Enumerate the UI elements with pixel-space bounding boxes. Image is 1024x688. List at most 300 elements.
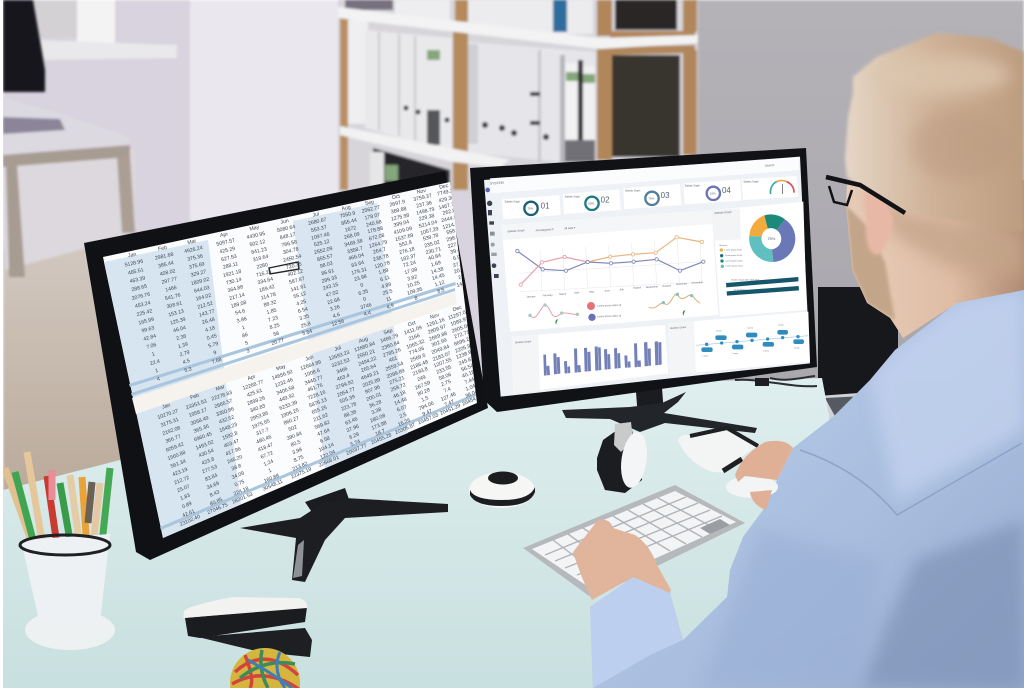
spreadsheet numbers: 1.85 (266, 307, 277, 316)
spreadsheet numbers: 22278.83 (211, 390, 233, 402)
donut panel: Statistic Graph 2015 2016 2017 (731, 279, 759, 282)
spreadsheet numbers: 541.76 (164, 292, 181, 302)
line chart panel: March (559, 293, 567, 296)
spreadsheet numbers: 238.78 (373, 253, 389, 263)
spreadsheet numbers: 720.35 (286, 261, 302, 271)
spreadsheet numbers: 298.87 (446, 233, 463, 243)
spreadsheet numbers: Nov (429, 312, 440, 321)
spreadsheet numbers: 25.07 (176, 484, 191, 494)
spreadsheet numbers: 34.69 (206, 481, 220, 491)
spreadsheet numbers: 58.06 (438, 372, 452, 382)
spreadsheet numbers: 0.89 (181, 501, 193, 510)
spreadsheet numbers: 4.6 (332, 312, 341, 320)
line chart panel: All data ▾ (564, 226, 576, 230)
spreadsheet numbers: 262.8 (442, 208, 456, 217)
spreadsheet numbers: 375.36 (187, 253, 204, 263)
spreadsheet numbers: 200.01 (366, 392, 383, 403)
spreadsheet numbers: 25.5 (382, 288, 394, 297)
spreadsheet numbers: 14.45 (431, 273, 446, 282)
spreadsheet numbers: 80.5 (290, 439, 302, 449)
spreadsheet numbers: 233.55 (436, 364, 453, 376)
spreadsheet numbers: 6960.45 (193, 431, 213, 443)
spreadsheet numbers: 272.71 (453, 329, 470, 340)
spreadsheet numbers: 1089.97 (450, 316, 470, 328)
spreadsheet numbers: 7.68 (211, 357, 223, 366)
back table and monitor at left (3, 0, 135, 277)
spreadsheet numbers: 3469.38 (344, 238, 363, 249)
line chart panel: June (604, 289, 610, 293)
spreadsheet numbers: 30548.11 (262, 479, 284, 493)
spreadsheet numbers: 463.4 (336, 373, 351, 383)
spreadsheet numbers: 3350.86 (215, 406, 235, 418)
donut panel: Lorem ipsum 25.00 (725, 254, 743, 257)
KPI card 3: 75% (648, 197, 655, 201)
spreadsheet numbers: 423.19 (172, 467, 189, 478)
spreadsheet numbers: 2.36 (176, 333, 187, 342)
spreadsheet numbers: 259.72 (390, 382, 407, 394)
spreadsheet numbers: 1.04 (465, 383, 477, 393)
spreadsheet numbers: 2.75 (440, 379, 452, 388)
spreadsheet numbers: 6.11 (380, 275, 391, 283)
spreadsheet numbers: 114.78 (260, 292, 277, 302)
spreadsheet numbers: 227.73 (447, 240, 464, 250)
sidebar icons (487, 201, 499, 278)
spreadsheet numbers: 2054.77 (336, 386, 356, 399)
spreadsheet numbers: 2.5 (399, 412, 408, 420)
spreadsheet numbers: 56.54 (460, 363, 475, 373)
timeline panel: Lorem (763, 350, 769, 353)
bookshelf with binders (338, 0, 698, 195)
spreadsheet numbers: 99.63 (141, 325, 155, 334)
spreadsheet numbers: 230.71 (425, 246, 442, 256)
spreadsheet numbers: 1498.79 (416, 206, 435, 217)
spreadsheet numbers: 1958.17 (188, 407, 208, 419)
donut panel: Q1 15 258 321 (733, 289, 746, 291)
white left margin (0, 0, 3, 688)
spreadsheet numbers: 223.78 (340, 401, 357, 413)
spreadsheet numbers: 627.53 (221, 254, 238, 263)
spreadsheet numbers: 2205.94 (454, 342, 474, 355)
spreadsheet numbers: 0 (360, 282, 364, 289)
spreadsheet numbers: 224.18 (233, 486, 250, 497)
spreadsheet numbers: 80.28 (417, 387, 431, 398)
spreadsheet numbers: 461.76 (307, 382, 324, 394)
spreadsheet numbers: 46.18 (392, 390, 407, 400)
spreadsheet numbers: 1592.8 (222, 430, 239, 442)
gauge card (742, 176, 798, 200)
spreadsheet numbers: 178.88 (367, 226, 384, 235)
pencil cup with pencils (5, 452, 115, 650)
spreadsheet numbers: 1467.76 (438, 201, 458, 211)
line chart panel: Statistic Graph (507, 228, 525, 233)
line chart panel: October (662, 285, 671, 288)
spreadsheet numbers: 5 (244, 340, 249, 347)
spreadsheet numbers: 67.72 (260, 450, 274, 461)
spreadsheet numbers: 141.61 (290, 283, 307, 293)
spreadsheet numbers: 0.75 (234, 479, 246, 488)
spreadsheet numbers: 22.68 (327, 297, 341, 306)
spreadsheet numbers: 20451.29 (439, 403, 462, 417)
line chart panel: All categories ▾ (535, 227, 554, 232)
spreadsheet numbers: 334.64 (257, 276, 274, 286)
spreadsheet numbers: Jul (312, 211, 320, 219)
spreadsheet numbers: 2550.21 (356, 349, 376, 360)
spreadsheet numbers: 165.99 (138, 317, 155, 327)
spreadsheet numbers: 3466 (336, 366, 349, 376)
spreadsheet numbers: 34.09 (231, 470, 245, 481)
spreadsheet numbers: 1207.55 (433, 357, 453, 369)
spreadsheet numbers: 83.84 (204, 473, 219, 483)
spreadsheet numbers: 240.98 (366, 219, 382, 229)
spreadsheet numbers: 425.29 (219, 246, 236, 255)
spreadsheet numbers: Aug (341, 204, 351, 212)
spreadsheet numbers: 143.77 (198, 309, 215, 319)
KPI card 3: 03 (661, 191, 670, 200)
spreadsheet numbers: 1975.65 (251, 418, 271, 431)
spreadsheet numbers: 63.46 (344, 416, 359, 427)
spreadsheet numbers: 36.28 (368, 399, 383, 410)
spreadsheet numbers: Sep (383, 328, 394, 336)
spreadsheet numbers: 430.54 (198, 448, 215, 459)
spreadsheet numbers: 8.43 (209, 489, 221, 499)
spreadsheet numbers: 848.17 (279, 232, 296, 241)
spreadsheet numbers: 432.52 (218, 414, 235, 426)
spreadsheet numbers: 5.74 (350, 439, 361, 448)
spreadsheet numbers: 2605.06 (451, 323, 471, 335)
KPI card 3: Statistic Graph (625, 190, 641, 193)
spreadsheet numbers: 229.38 (418, 213, 435, 223)
spreadsheet numbers: 1906.25 (280, 408, 300, 420)
spreadsheet numbers: 466.04 (348, 252, 365, 262)
spreadsheet numbers: 2166 (408, 333, 421, 342)
spreadsheet numbers: 2193.8 (412, 366, 429, 377)
spreadsheet numbers: 0.45 (206, 333, 218, 342)
spreadsheet numbers: 502 (288, 424, 298, 433)
spreadsheet numbers: 6.96 (452, 254, 464, 262)
spreadsheet numbers: 730.14 (225, 277, 242, 287)
spreadsheet numbers: 2669.88 (428, 331, 448, 343)
spreadsheet numbers: 5.64 (302, 328, 313, 337)
spreadsheet numbers: 4430.95 (246, 231, 266, 241)
spreadsheet numbers: 2049.84 (431, 344, 450, 356)
KPI card 2: Statistic Graph (565, 195, 581, 198)
KPI card 1: Statistic Graph (505, 201, 521, 204)
spreadsheet numbers: 178.07 (364, 212, 381, 222)
spreadsheet numbers: 480.46 (256, 434, 273, 446)
spreadsheet numbers: 7228.16 (307, 389, 327, 402)
donut panel: Statistics (719, 244, 727, 247)
bar chart panel (512, 325, 668, 393)
computer mouse (726, 476, 778, 498)
spreadsheet numbers: 8.75 (293, 454, 305, 464)
line chart panel: August (633, 286, 641, 290)
spreadsheet numbers: 83.64 (351, 260, 365, 269)
spreadsheet numbers: 17.08 (404, 267, 418, 276)
tape roll (469, 472, 535, 508)
spreadsheet numbers: 402.12 (287, 268, 304, 278)
cables (735, 376, 817, 386)
spreadsheet numbers: 418.47 (257, 442, 274, 453)
spreadsheet numbers: 4 (156, 376, 161, 383)
spreadsheet numbers: 20454.28 (461, 393, 484, 407)
spreadsheet numbers: 72.24 (403, 260, 417, 269)
spreadsheet numbers: Dec (439, 183, 449, 191)
spreadsheet numbers: 1 (155, 368, 159, 374)
spreadsheet numbers: 4.25 (296, 299, 307, 307)
spreadsheet numbers: Nov (416, 188, 427, 196)
spreadsheet numbers: 1.39 (177, 342, 189, 350)
spreadsheet numbers: 7.23 (268, 315, 279, 324)
timeline panel: Lorem (703, 355, 709, 358)
spreadsheet numbers: 1.69 (378, 268, 389, 276)
spreadsheet numbers: 2.79 (179, 350, 191, 358)
spreadsheet numbers: 408.02 (159, 268, 176, 278)
spreadsheet numbers: 2076.76 (131, 292, 151, 302)
spreadsheet numbers: 179.31 (351, 267, 368, 277)
spreadsheet numbers: 716.24 (255, 269, 272, 279)
spreadsheet numbers: 7.06 (146, 342, 157, 351)
spreadsheet numbers: 403.47 (223, 438, 240, 450)
spreadsheet numbers: 264.7 (372, 247, 387, 256)
spreadsheet numbers: 125.39 (170, 317, 187, 327)
spreadsheet numbers: 42.61 (182, 508, 196, 519)
spreadsheet numbers: 465.51 (127, 267, 144, 277)
spreadsheet numbers: 20457.03 (417, 412, 440, 426)
timeline panel: Lorem (716, 330, 722, 333)
spreadsheet numbers: 366.77 (165, 434, 182, 445)
KPI card 2: 50% (588, 202, 595, 206)
spreadsheet numbers: 2025.89 (362, 377, 381, 389)
mouse pad device (678, 428, 758, 472)
spreadsheet numbers: 1466.79 (380, 333, 399, 345)
spreadsheet numbers: 655.25 (311, 405, 328, 416)
gauge card: Statistic Graph (743, 181, 759, 184)
spreadsheet numbers: 120.78 (374, 260, 391, 270)
spreadsheet numbers: 20.21 (453, 266, 468, 275)
spreadsheet numbers: 8.5 (437, 287, 445, 295)
spreadsheet numbers: 23353.53 (185, 399, 208, 411)
spreadsheet numbers: May (275, 363, 287, 372)
spreadsheet numbers: Jul (334, 345, 342, 353)
KPI card 4: 10% (710, 192, 716, 196)
spreadsheet numbers: 3746 (360, 302, 373, 311)
neck and face (846, 180, 1024, 338)
spreadsheet numbers: 182.37 (400, 253, 417, 263)
line chart panel: April (574, 291, 580, 295)
dashboard screen: Search (765, 163, 775, 168)
spreadsheet numbers: 5.79 (208, 341, 219, 350)
spreadsheet numbers: Sep (364, 199, 375, 207)
line chart panel: September (646, 285, 658, 289)
spreadsheet numbers: 2450.54 (283, 254, 302, 264)
dashboard screen: SYSTEM (490, 181, 504, 186)
spreadsheet numbers: 217.14 (229, 292, 246, 302)
spreadsheet numbers: 399.04 (393, 219, 410, 229)
rubber band ball (230, 648, 300, 688)
spreadsheet numbers: 1291.16 (426, 317, 446, 329)
spreadsheet numbers: 20305.87 (394, 422, 417, 436)
spreadsheet numbers: 14.48 (394, 396, 408, 407)
spreadsheet numbers: 1065.32 (406, 339, 426, 351)
spreadsheet numbers: 2562.77 (361, 205, 381, 215)
hand on mouse (735, 441, 793, 510)
spreadsheet numbers: Aug (358, 336, 369, 345)
spreadsheet numbers: 317.7 (255, 427, 270, 437)
spreadsheet numbers: 1537.69 (395, 233, 414, 243)
KPI card 4: Statistic Graph (685, 185, 701, 188)
donut panel: Lorem ipsum 25.00 (725, 259, 743, 262)
spreadsheet numbers: 3.98 (292, 447, 303, 456)
spreadsheet numbers: 1 (241, 325, 246, 331)
spreadsheet numbers: 26.48 (201, 317, 216, 326)
spreadsheet numbers: 3175.31 (160, 417, 180, 429)
spreadsheet numbers: Mar (215, 384, 226, 393)
spreadsheet numbers: 235.02 (424, 239, 441, 249)
spreadsheet numbers: 243.15 (322, 282, 339, 292)
spreadsheet numbers: 288.11 (222, 261, 239, 271)
spreadsheet numbers: 1097.46 (311, 232, 330, 242)
spreadsheet numbers: 2559.54 (385, 361, 404, 373)
spreadsheet numbers: Feb (190, 393, 200, 401)
spreadsheet numbers: 40.18 (461, 369, 476, 380)
spreadsheet numbers: 6.58 (319, 435, 331, 445)
KPI card 4 (683, 179, 741, 204)
spreadsheet numbers: 9 (213, 350, 217, 356)
spreadsheet numbers: 5097.57 (216, 238, 236, 248)
spreadsheet numbers: 86.61 (321, 268, 335, 277)
KPI card 4: 04 (722, 186, 731, 195)
spreadsheet numbers: 58 (273, 331, 280, 338)
spreadsheet numbers: 304.78 (282, 246, 299, 256)
spreadsheet numbers: 423.8 (201, 456, 215, 467)
spreadsheet numbers: 3 (246, 348, 251, 355)
spreadsheet numbers: 1560.88 (167, 450, 187, 462)
spreadsheet numbers: 1921.18 (222, 269, 242, 279)
spreadsheet numbers: 841.23 (251, 246, 268, 256)
dashboard screen (484, 157, 810, 397)
spreadsheet numbers: 855.44 (341, 218, 358, 227)
spreadsheet numbers: Jan (161, 402, 171, 411)
spreadsheet numbers: 2360.84 (381, 340, 401, 352)
spreadsheet numbers: 644.03 (193, 285, 210, 295)
spreadsheet numbers: 1264.79 (368, 239, 388, 250)
spreadsheet numbers: 6233.39 (279, 400, 298, 412)
spreadsheet numbers: 3068.49 (190, 415, 210, 427)
spreadsheet numbers: 1.83 (180, 493, 191, 502)
spreadsheet numbers: 385.44 (158, 260, 175, 270)
spreadsheet numbers: 39.46 (450, 246, 464, 256)
spreadsheet numbers: 98.03 (319, 261, 333, 270)
spreadsheet numbers: 7.4 (443, 386, 452, 394)
spreadsheet numbers: 3.35 (299, 313, 310, 322)
spreadsheet numbers: 552.8 (399, 240, 413, 249)
spreadsheet numbers: 18.7 (375, 428, 386, 438)
spreadsheet numbers: 5876.13 (308, 397, 328, 409)
spreadsheet numbers: 5.3 (184, 366, 193, 374)
spreadsheet numbers: 276.18 (399, 246, 416, 256)
timeline panel: Lorem (794, 347, 800, 350)
spreadsheet numbers: 417.96 (225, 446, 242, 458)
spreadsheet numbers: 22668.01 (318, 455, 340, 469)
spreadsheet numbers: Apr (247, 374, 257, 382)
spreadsheet numbers: 672.08 (368, 233, 385, 242)
spreadsheet numbers: 502.12 (249, 239, 266, 248)
spreadsheet numbers: 2799.92 (335, 379, 355, 391)
KPI card 2: 02 (601, 196, 610, 205)
spreadsheet numbers: 6059.42 (165, 442, 185, 454)
spreadsheet numbers: 55.12 (293, 291, 307, 300)
spreadsheet numbers: 12680.84 (354, 341, 376, 354)
KPI card 2 (563, 189, 621, 214)
spreadsheet numbers: 6.07 (396, 404, 408, 414)
spreadsheet numbers: 288.65 (131, 284, 148, 293)
spreadsheet numbers: 319.64 (252, 254, 269, 263)
spreadsheet numbers: 109.95 (406, 286, 423, 297)
spreadsheet numbers: 774.06 (408, 346, 425, 357)
KPI card 1: 75% (527, 207, 534, 211)
spreadsheet numbers: 855.57 (316, 253, 333, 263)
spreadsheet numbers: 189.08 (230, 300, 247, 310)
spreadsheet numbers: 505.39 (339, 394, 356, 405)
spreadsheet numbers: 37.79 (452, 260, 467, 269)
spreadsheet numbers: 38.8 (231, 463, 242, 472)
line chart panel: May (589, 290, 595, 294)
spreadsheet numbers: 160.88 (263, 473, 280, 485)
donut panel: Statistic Graph (714, 210, 732, 215)
line chart panel (502, 210, 718, 332)
spreadsheet numbers: 7.47 (444, 399, 455, 408)
spreadsheet numbers: 1.12 (434, 280, 446, 288)
spreadsheet numbers: 4.18 (205, 325, 216, 334)
spreadsheet numbers: 569.82 (314, 420, 331, 431)
spreadsheet numbers: 4.4 (363, 310, 372, 318)
spreadsheet numbers: 2953.86 (250, 410, 269, 423)
line chart panel: January (527, 295, 536, 299)
spreadsheet numbers: 11 (386, 296, 393, 303)
spreadsheet numbers: 2280 (256, 262, 269, 271)
spreadsheet numbers: 80.85 (209, 497, 224, 507)
spreadsheet numbers: 249 (416, 374, 427, 383)
spreadsheet numbers: 4649.21 (360, 370, 380, 382)
tape dispenser (597, 422, 650, 493)
spreadsheet numbers: 2569.6 (410, 353, 427, 364)
spreadsheet numbers: 5080.64 (276, 224, 296, 234)
spreadsheet numbers: 2444.02 (441, 214, 460, 224)
spreadsheet numbers: 28201.53 (231, 492, 254, 506)
spreadsheet numbers: 1 (268, 468, 273, 474)
bar chart panel: Statistic Graph (515, 340, 532, 344)
spreadsheet numbers: 2186.48 (409, 359, 429, 371)
spreadsheet numbers: 5214.04 (418, 219, 438, 230)
spreadsheet numbers: 6.29 (348, 432, 360, 441)
spreadsheet numbers: 2785.26 (382, 347, 402, 359)
spreadsheet numbers: 164.02 (195, 293, 212, 303)
spreadsheet numbers: 1238.94 (455, 349, 475, 361)
spreadsheet numbers: 1.24 (263, 459, 275, 468)
spreadsheet numbers: 3.82 (407, 274, 418, 283)
spreadsheet numbers: 104.14 (318, 442, 335, 454)
spreadsheet numbers: 211.62 (313, 412, 329, 423)
donut panel: Lorem ipsum 25.00 (725, 248, 743, 251)
spreadsheet numbers: 907.96 (364, 384, 381, 396)
spreadsheet numbers: 46.04 (173, 325, 187, 334)
spreadsheet numbers: 463.39 (129, 275, 146, 285)
spreadsheet numbers: 27046.75 (207, 502, 229, 516)
donut panel: Lorem ipsum 25.00 (726, 265, 744, 268)
spreadsheet numbers: 173.98 (371, 420, 388, 432)
spreadsheet numbers: 1809.02 (190, 277, 210, 287)
stapler (183, 597, 312, 657)
